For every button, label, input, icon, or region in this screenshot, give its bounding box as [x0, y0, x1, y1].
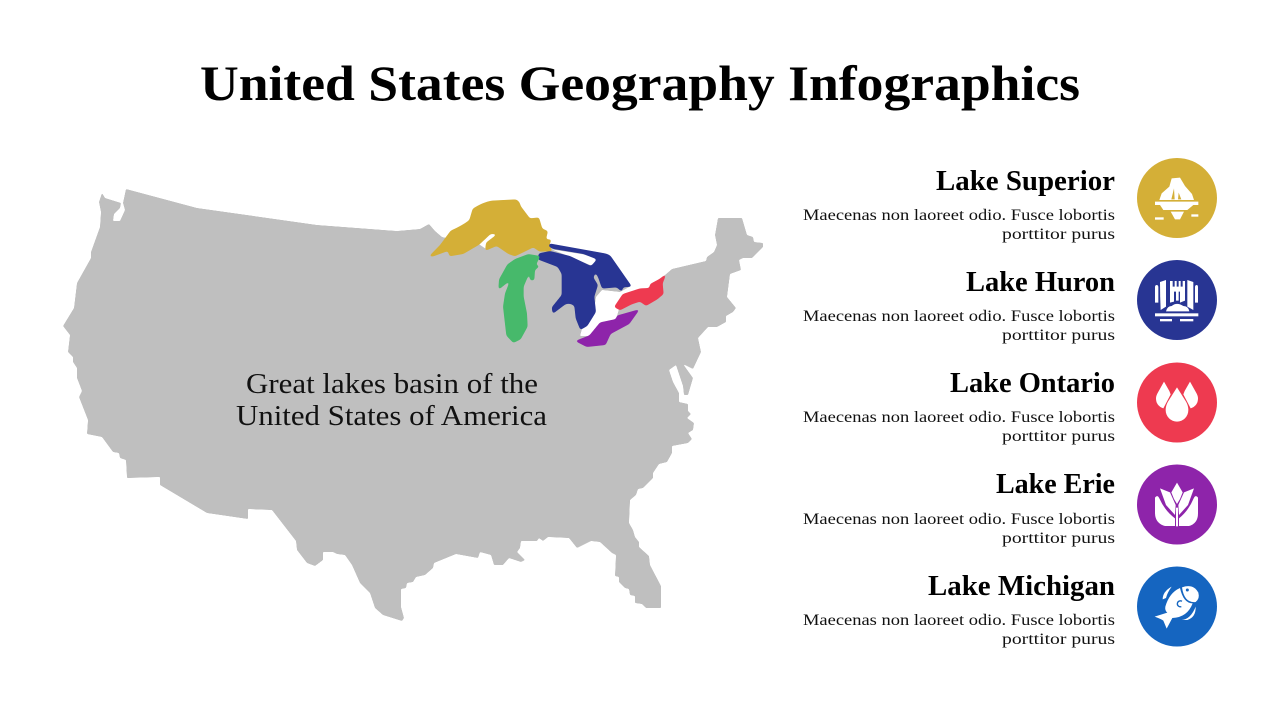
- land silhouette: [63, 189, 763, 621]
- text: Lake Superior description: Maecenas non laoreet odio. Fusce lobortis: [803, 207, 1115, 224]
- icon: iceberg: [1137, 158, 1217, 238]
- text: Lake Huron description: porttitor purus: [1002, 327, 1115, 344]
- item: Lake Superior: [803, 158, 1217, 243]
- text: Lake Michigan description: Maecenas non laoreet odio. Fusce lobortis: [803, 612, 1115, 629]
- map caption: [236, 369, 548, 432]
- lake: Michigan: [498, 254, 540, 343]
- item: Lake Huron: [803, 260, 1217, 344]
- lake: Ontario: [614, 273, 667, 310]
- text: Lake Ontario description: [803, 409, 1115, 445]
- map caption: United States of America: [236, 401, 548, 432]
- map: United States with Great Lakes: [63, 189, 763, 621]
- heading: Lake Superior: Lake Superior: [936, 166, 1115, 197]
- icon: waterfall: [1137, 260, 1217, 340]
- text: Lake Ontario description: porttitor purus: [1002, 428, 1115, 445]
- text: Lake Michigan description: porttitor purus: [1002, 631, 1115, 648]
- title: United States Geography Infographics: [200, 55, 1080, 111]
- heading: Lake Michigan: Lake Michigan: [928, 571, 1115, 602]
- lake: Superior: [429, 199, 553, 257]
- item: Lake Michigan: [803, 566, 1217, 648]
- icon: water drops: [1137, 362, 1217, 442]
- lake: Huron: [538, 243, 632, 330]
- icon: lotus: [1137, 464, 1217, 544]
- heading: Lake Ontario: Lake Ontario: [950, 368, 1115, 399]
- text: Lake Huron description: [803, 308, 1115, 344]
- text: Lake Superior description: porttitor purus: [1002, 226, 1115, 243]
- lake: Erie: [575, 309, 640, 347]
- text: Lake Erie description: [803, 511, 1115, 547]
- map caption: Great lakes basin of the: [246, 369, 538, 400]
- heading: Lake Erie: Lake Erie: [996, 469, 1115, 500]
- text: Lake Superior description: [803, 207, 1115, 243]
- heading: Lake Huron: Lake Huron: [966, 267, 1115, 298]
- text: Lake Michigan description: [803, 612, 1115, 648]
- text: Lake Ontario description: Maecenas non laoreet odio. Fusce lobortis: [803, 409, 1115, 426]
- item: Lake Ontario: [803, 362, 1217, 445]
- text: Lake Erie description: porttitor purus: [1002, 530, 1115, 547]
- text: Lake Huron description: Maecenas non laoreet odio. Fusce lobortis: [803, 308, 1115, 325]
- icon: fish: [1137, 566, 1217, 646]
- item: Lake Erie: [803, 464, 1217, 547]
- text: Lake Erie description: Maecenas non laoreet odio. Fusce lobortis: [803, 511, 1115, 528]
